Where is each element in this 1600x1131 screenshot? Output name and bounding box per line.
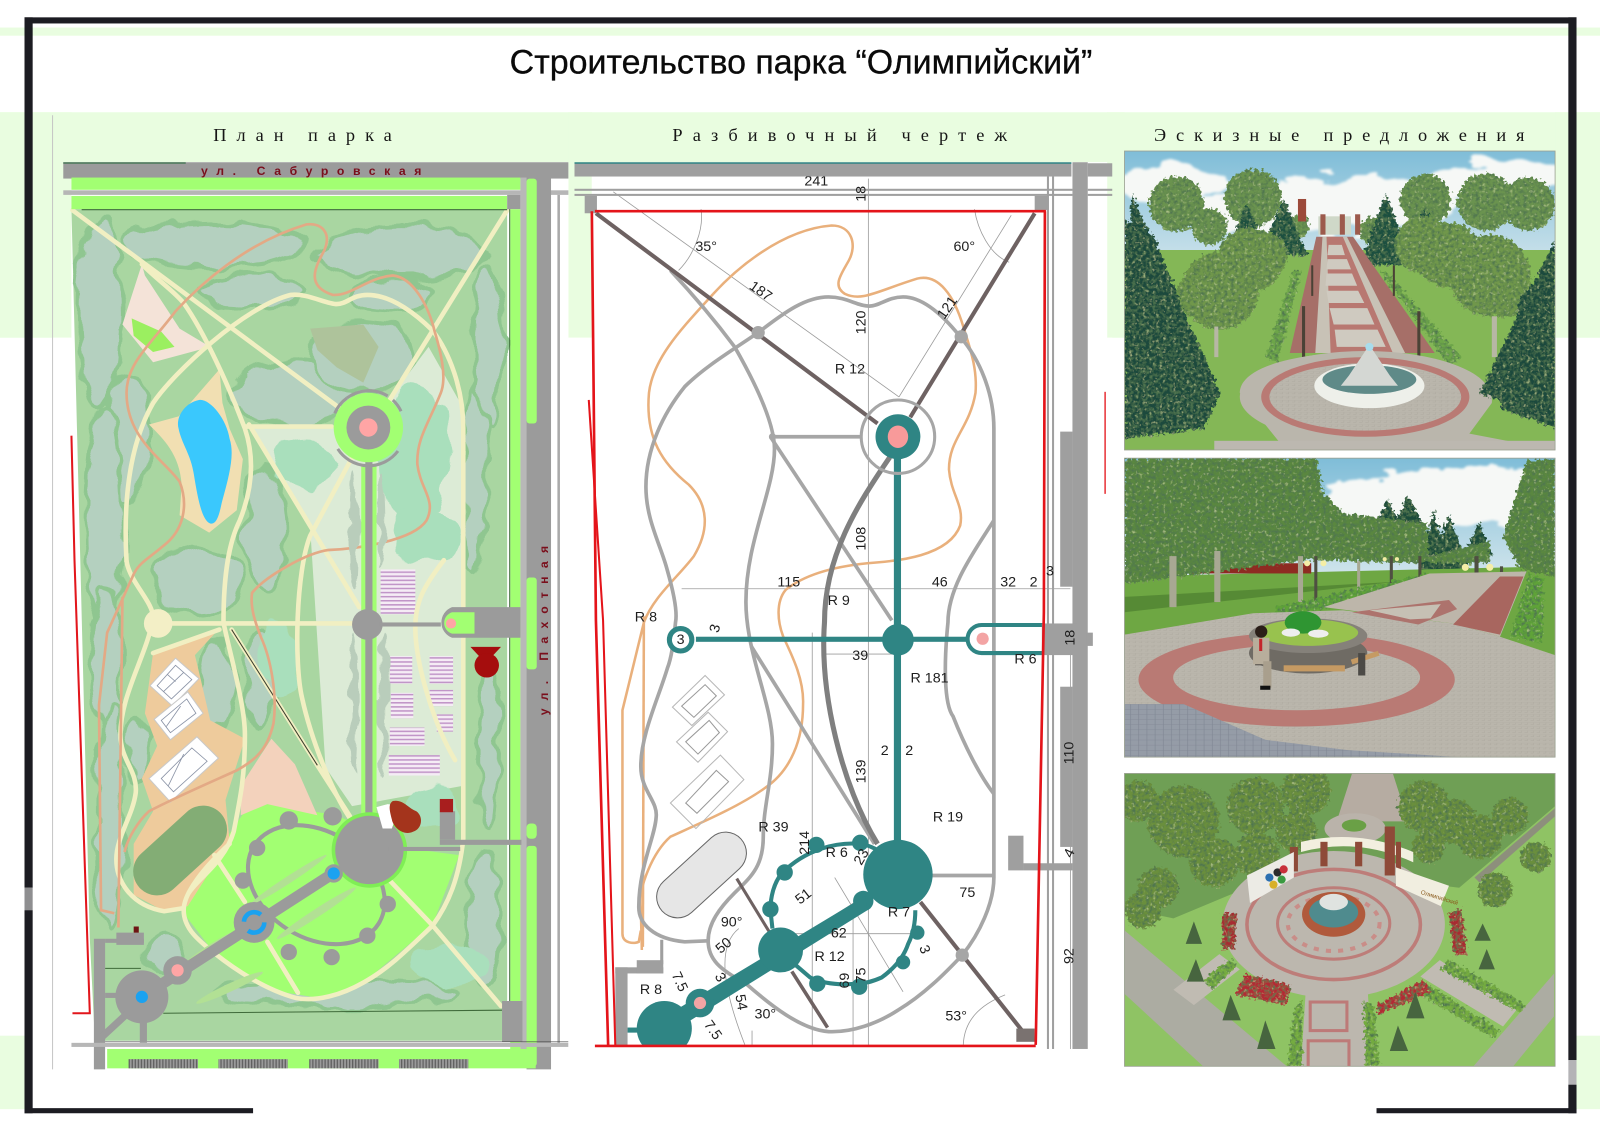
dimensions: 7.5 [700, 1018, 725, 1043]
photo 2: round planter with bench [1124, 458, 1555, 757]
hedge [1276, 573, 1543, 643]
layout orange trail [622, 226, 976, 950]
dimensions: 187 [746, 278, 775, 305]
plaza discs [1222, 851, 1445, 998]
paving [1124, 610, 1555, 757]
alley band [1323, 571, 1527, 637]
dimensions: 3 [707, 623, 724, 634]
gray ring around north square [861, 400, 935, 473]
heading: sketch proposals: Эскизные предложения [1154, 125, 1525, 145]
avenue and squares [142, 449, 521, 1007]
panel: park plan [52, 115, 568, 1069]
fountain [1314, 343, 1424, 408]
dark red medal [470, 647, 501, 678]
gray roads [1123, 930, 1287, 1066]
dimensions: 90° [721, 915, 742, 931]
plaza [1240, 355, 1508, 441]
lawn [1124, 566, 1555, 658]
title: Строительство парка “Олимпийский” [510, 43, 1092, 81]
dark firs [1230, 194, 1454, 265]
sand: courts [134, 630, 245, 911]
dimensions: 32 [1000, 575, 1016, 591]
dimensions: R 8 [635, 609, 657, 625]
roads of layout [574, 162, 1112, 1049]
mint meadow blobs [259, 385, 488, 985]
dimensions: 50 [713, 935, 735, 957]
dimensions: 2 [881, 743, 889, 759]
dimensions: 35° [695, 239, 717, 255]
ring [1138, 633, 1455, 727]
photo 1: alley with fountain [1117, 151, 1571, 450]
middle node [352, 609, 383, 640]
dimensions: 2 [1030, 575, 1038, 591]
willow rows [1177, 216, 1532, 330]
tennis court outlines [670, 675, 744, 829]
hedges and flowers [1204, 908, 1525, 1066]
clouds [1327, 465, 1541, 531]
gate [1298, 199, 1360, 235]
dimensions: 60° [953, 239, 975, 255]
south-west plaza [100, 864, 343, 1043]
playground peninsula [122, 264, 210, 362]
dimensions: 53° [945, 1008, 967, 1024]
pond [178, 400, 232, 524]
dimensions: 75 [853, 967, 869, 983]
dimensions [635, 186, 1079, 1043]
dimensions: 115 [777, 575, 800, 591]
light meadow [249, 347, 463, 806]
trees left and right [1117, 766, 1551, 929]
dimensions: 62 [831, 926, 847, 942]
photo borders [1124, 151, 1555, 1066]
dimensions: 4 [1061, 846, 1079, 860]
orange trail [99, 224, 443, 928]
clouds [1117, 160, 1571, 233]
willow row [1124, 458, 1555, 584]
shrub hedges [1265, 270, 1461, 365]
distant trees [1149, 169, 1555, 245]
red boundary lines [589, 211, 1105, 1046]
east entrance [380, 607, 520, 638]
mid grass [1124, 250, 1555, 450]
pink flower beds [381, 569, 453, 775]
dimension label clipped at the top: 241 [804, 174, 828, 190]
shadow paving [1124, 704, 1459, 757]
seated man [1253, 625, 1271, 690]
olive glade [310, 324, 379, 383]
photo 3: aerial view of entrance plaza [1117, 766, 1555, 1071]
dimensions: 120 [853, 310, 869, 334]
dimensions: R 6 [826, 845, 848, 861]
dimensions: 108 [853, 527, 869, 551]
dimensions: 3 [677, 632, 685, 648]
top circular square [334, 391, 403, 466]
entrance gate: Олимпийский [1420, 889, 1459, 907]
far firs [1378, 495, 1494, 570]
dimensions: 18 [1062, 630, 1078, 646]
dimensions: 2 [905, 743, 913, 759]
lamp posts [1302, 265, 1420, 358]
street label: Saburovskaya: ул. Сабуровская [201, 164, 421, 178]
dimensions: 121 [934, 294, 961, 322]
cream footpaths [72, 210, 507, 1006]
dimensions: 139 [853, 759, 869, 783]
dimensions: 23 [851, 846, 873, 868]
tree trunks [1214, 316, 1497, 357]
panel: layout drawing [568, 162, 1112, 1056]
dimensions: 39 [852, 648, 868, 664]
dimensions: 30° [755, 1006, 776, 1022]
dimensions: 3 [1046, 563, 1054, 579]
far alley [1337, 773, 1408, 821]
stadium [157, 830, 203, 871]
bottom lawn edge [163, 1010, 502, 1013]
dimensions: R 9 [828, 593, 850, 609]
dimensions: 214 [797, 831, 813, 855]
tennis courts [149, 658, 218, 802]
teal avenues [628, 414, 1043, 1056]
alley nodes [752, 326, 969, 962]
alley [1290, 237, 1435, 353]
roads [63, 162, 568, 1069]
dimensions: R 12 [815, 949, 845, 965]
dimensions: 46 [932, 575, 948, 591]
red boundary [71, 436, 90, 1013]
dimensions: 7.5 [668, 970, 691, 994]
entrance gate [1247, 827, 1459, 907]
dimensions: R 8 [640, 982, 662, 998]
dimensions: R 6 [1014, 651, 1037, 667]
diagonal alleys [596, 213, 1035, 1034]
dimension lines [613, 179, 1078, 1049]
dimensions: 75 [959, 885, 975, 901]
dimensions: 51 [792, 886, 815, 908]
trunks and lamps [1169, 551, 1360, 607]
dimensions: 92 [1061, 948, 1077, 964]
radial paths [1301, 994, 1372, 1066]
heading: layout drawing: Разбивочный чертеж [672, 125, 1007, 145]
dimensions: R 7 [888, 904, 910, 920]
forest blobs [78, 217, 502, 1006]
heading: plan: План парка [213, 125, 392, 145]
stadium outline [678, 853, 726, 897]
dimensions: 110 [1061, 742, 1077, 764]
street label: Pakhotnaya: ул. Пахотная [537, 546, 551, 715]
fountain [1302, 892, 1365, 937]
bush strips along diagonal [182, 852, 358, 1007]
lawn ellipse ring [226, 801, 407, 969]
dimensions: R 12 [835, 361, 865, 377]
foreground spruces [1124, 194, 1555, 439]
sand: pond shore [149, 369, 243, 533]
dimensions: 18 [853, 186, 869, 202]
dimensions: 3 [711, 970, 729, 985]
park ground [71, 209, 520, 1041]
planter [1249, 611, 1380, 675]
sport ground [241, 739, 317, 815]
dimensions: R 39 [758, 820, 789, 836]
topiary [1186, 921, 1495, 1051]
bright lawn [184, 804, 459, 999]
dimensions: 69 [837, 973, 853, 989]
dimensions: R 19 [933, 809, 963, 825]
layout gray paths [639, 270, 994, 1032]
dimensions: 3 [915, 943, 933, 956]
dimensions: R 181 [911, 671, 949, 687]
dimensions: 54 [731, 993, 750, 1012]
